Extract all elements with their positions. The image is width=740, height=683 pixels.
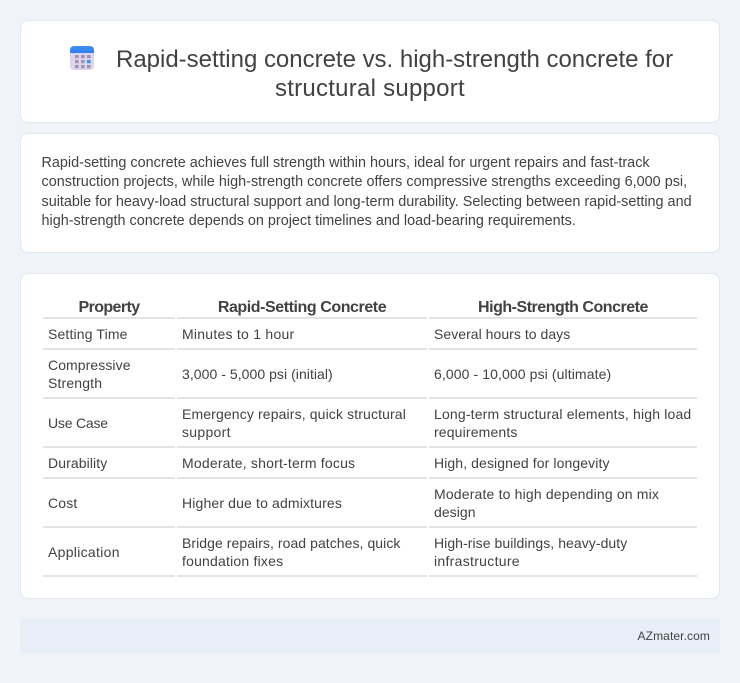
row: use case: Use Case [48, 415, 108, 431]
panel: introduction [20, 133, 720, 253]
table header: Rapid-Setting Concrete [218, 299, 386, 316]
row: application: foundation fixes [182, 553, 283, 569]
row: durability: High, designed for longevity [434, 455, 610, 471]
row: application [48, 535, 628, 569]
intro text: Rapid-setting concrete achieves full strength within hours, ideal for urgent repairs and fast-track [42, 154, 650, 170]
row: setting time [48, 326, 570, 342]
title: Rapid-setting concrete vs. high-strength concrete for [116, 46, 673, 73]
icon: calendar [70, 46, 94, 70]
row: compressive strength: Strength [48, 375, 102, 391]
table header [78, 299, 648, 316]
table header: Property [78, 299, 140, 316]
row: application: High-rise buildings, heavy-duty [434, 535, 627, 551]
row: cost [48, 486, 659, 520]
row: durability: Durability [48, 455, 107, 471]
intro text: suitable for heavy-load structural support and long-term durability. Selecting between rapid-setting and [42, 194, 692, 210]
row: compressive strength: 6,000 - 10,000 psi (ultimate) [434, 366, 611, 382]
title: structural support [275, 75, 465, 102]
row: application: Bridge repairs, road patches, quick [182, 535, 400, 551]
row: setting time: Minutes to 1 hour [182, 326, 294, 342]
row: cost: Higher due to admixtures [182, 495, 342, 511]
row: setting time: Setting Time [48, 326, 128, 342]
row: setting time: Several hours to days [434, 326, 570, 342]
row: cost: design [434, 504, 476, 520]
row: use case: Emergency repairs, quick structural [182, 406, 406, 422]
footer [20, 619, 720, 653]
row: cost: Cost [48, 495, 77, 511]
footer brand: AZmater.com [638, 629, 710, 643]
row: compressive strength: 3,000 - 5,000 psi (initial) [182, 366, 333, 382]
row: cost: Moderate to high depending on mix [434, 486, 659, 502]
row: durability [48, 455, 610, 471]
panel: title header [20, 20, 720, 123]
intro text: high-strength concrete depends on project timelines and load-bearing requirements. [42, 213, 576, 229]
title [116, 46, 673, 102]
row: compressive strength: Compressive [48, 357, 131, 373]
row: use case: requirements [434, 424, 518, 440]
row: application: Application [48, 544, 120, 560]
intro text: construction projects, while high-strength concrete offers compressive strengths exceeding 6,000 psi, [42, 174, 687, 190]
intro text [42, 154, 692, 229]
panel: comparison table [20, 273, 720, 599]
row: application: infrastructure [434, 553, 520, 569]
row: use case: support [182, 424, 231, 440]
row: use case [48, 406, 691, 440]
row: durability: Moderate, short-term focus [182, 455, 355, 471]
row: compressive strength [48, 357, 611, 391]
table header: High-Strength Concrete [478, 299, 648, 316]
row: use case: Long-term structural elements, high load [434, 406, 691, 422]
